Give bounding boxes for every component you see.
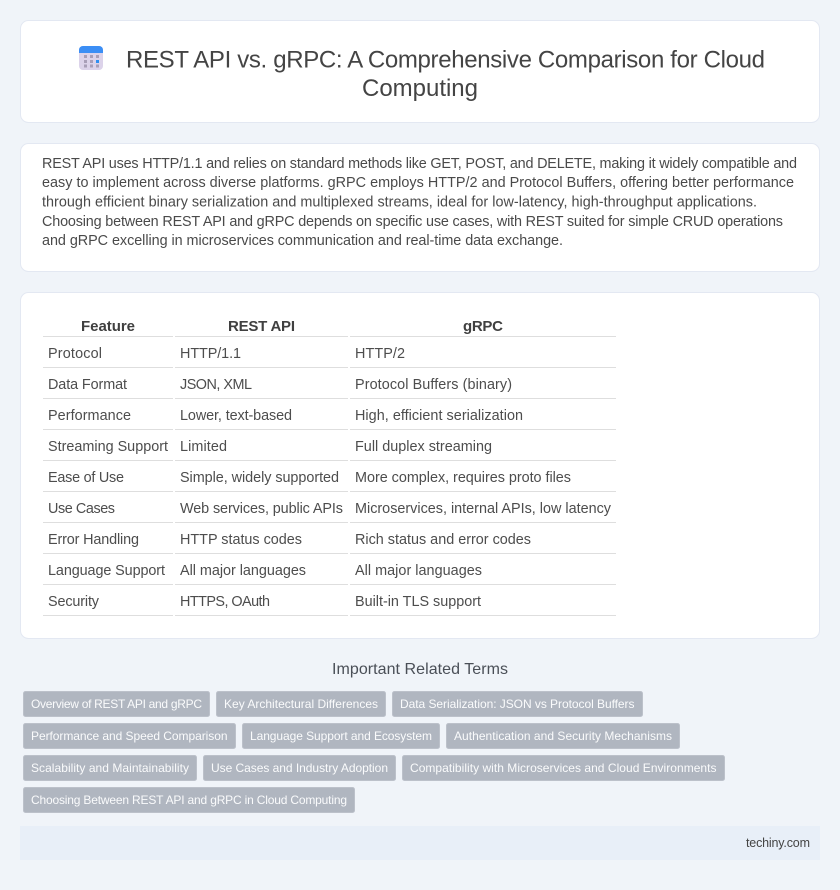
row: Ease of Use bbox=[48, 470, 571, 486]
tag: serialization bbox=[392, 692, 642, 716]
tag: choosing: Choosing Between REST API and gRPC in Cloud Computing bbox=[31, 793, 347, 807]
title: Computing bbox=[362, 75, 478, 102]
tag: compatibility bbox=[402, 756, 724, 780]
row: Protocol: Protocol bbox=[48, 346, 102, 362]
row: Error Handling: HTTP status codes bbox=[180, 532, 302, 548]
row: Security: HTTPS, OAuth bbox=[180, 594, 270, 610]
table header bbox=[81, 318, 503, 335]
row: Language Support bbox=[48, 563, 482, 579]
row: Ease of Use: Ease of Use bbox=[48, 470, 124, 486]
row: Streaming Support: Full duplex streaming bbox=[355, 439, 492, 455]
table header: gRPC bbox=[463, 318, 503, 335]
icon: calendar bbox=[79, 46, 103, 70]
row: Streaming Support bbox=[48, 439, 492, 455]
title bbox=[126, 46, 765, 102]
text block: summary paragraph bbox=[42, 156, 797, 249]
tag: architecture: Key Architectural Differences bbox=[224, 697, 378, 711]
row: Language Support: All major languages bbox=[355, 563, 482, 579]
text block: summary paragraph: and gRPC excelling in microservices communication and real-time data exchange. bbox=[42, 233, 563, 249]
tag: security: Authentication and Security Mechanisms bbox=[454, 729, 672, 743]
panel: comparison table bbox=[20, 292, 820, 638]
row: Data Format: Data Format bbox=[48, 377, 127, 393]
tag: overview: Overview of REST API and gRPC bbox=[31, 697, 202, 711]
tag: security bbox=[446, 724, 680, 748]
tag: performance bbox=[24, 724, 236, 748]
row: Protocol bbox=[48, 346, 405, 362]
row: Performance: Lower, text-based bbox=[180, 408, 292, 424]
text block: summary paragraph: easy to implement across diverse platforms. gRPC employs HTTP/2 and Protocol Buffers, offering better performance bbox=[42, 175, 794, 191]
row: Error Handling bbox=[48, 532, 531, 548]
row: Use Cases bbox=[48, 501, 612, 517]
tag: architecture bbox=[216, 692, 386, 716]
tag: overview bbox=[24, 692, 210, 716]
tag: scalability: Scalability and Maintainability bbox=[31, 761, 189, 775]
table header: REST API bbox=[228, 318, 295, 335]
table header: Feature bbox=[81, 318, 135, 335]
text block: summary paragraph: Choosing between REST API and gRPC depends on specific use cases, with REST suited for simple CRUD operations bbox=[42, 214, 783, 230]
footer credit: techiny.com bbox=[746, 836, 810, 850]
tag: compatibility: Compatibility with Microservices and Cloud Environments bbox=[410, 761, 716, 775]
row: Streaming Support: Streaming Support bbox=[48, 439, 168, 455]
title: REST API vs. gRPC: A Comprehensive Comparison for Cloud bbox=[126, 46, 765, 74]
tag: language bbox=[242, 724, 440, 748]
row: Streaming Support: Limited bbox=[180, 439, 227, 455]
tag: use cases: Use Cases and Industry Adoption bbox=[211, 761, 388, 775]
tag: serialization: Data Serialization: JSON vs Protocol Buffers bbox=[400, 697, 634, 711]
row: Language Support: All major languages bbox=[180, 563, 306, 579]
footer bbox=[20, 826, 820, 860]
row: Ease of Use: Simple, widely supported bbox=[180, 470, 339, 486]
tag: scalability bbox=[24, 756, 196, 780]
row: Error Handling: Error Handling bbox=[48, 532, 139, 548]
row: Use Cases: Web services, public APIs bbox=[180, 501, 343, 517]
tag: use cases bbox=[204, 756, 396, 780]
tag: language: Language Support and Ecosystem bbox=[250, 729, 432, 743]
heading: related terms: Important Related Terms bbox=[332, 661, 508, 678]
text block: summary paragraph: REST API uses HTTP/1.1 and relies on standard methods like GET, POST, and DELETE, making it widely compatible and bbox=[42, 156, 797, 172]
row: Use Cases: Use Cases bbox=[48, 501, 115, 517]
row: Security bbox=[48, 594, 481, 610]
row: Error Handling: Rich status and error codes bbox=[355, 532, 531, 548]
row: Language Support: Language Support bbox=[48, 563, 165, 579]
related term tags bbox=[24, 692, 724, 812]
text block: summary paragraph: through efficient binary serialization and multiplexed streams, ideal for low-latency, high-throughput applications. bbox=[42, 194, 757, 210]
row: Performance bbox=[48, 408, 523, 424]
row: Protocol: HTTP/2 bbox=[355, 346, 405, 362]
row: Protocol: HTTP/1.1 bbox=[180, 346, 241, 362]
row: Ease of Use: More complex, requires proto files bbox=[355, 470, 571, 486]
row: Use Cases: Microservices, internal APIs, low latency bbox=[355, 501, 612, 517]
row: Security: Security bbox=[48, 594, 100, 610]
tag: choosing bbox=[24, 788, 354, 812]
row: Security: Built-in TLS support bbox=[355, 594, 481, 610]
tag: performance: Performance and Speed Comparison bbox=[31, 729, 228, 743]
panel: summary bbox=[20, 144, 820, 272]
row: Data Format: JSON, XML bbox=[180, 377, 252, 393]
table grid lines bbox=[43, 336, 616, 616]
row: Data Format bbox=[48, 377, 512, 393]
row: Performance: Performance bbox=[48, 408, 131, 424]
row: Data Format: Protocol Buffers (binary) bbox=[355, 377, 512, 393]
row: Performance: High, efficient serialization bbox=[355, 408, 523, 424]
panel: header bbox=[20, 20, 820, 122]
